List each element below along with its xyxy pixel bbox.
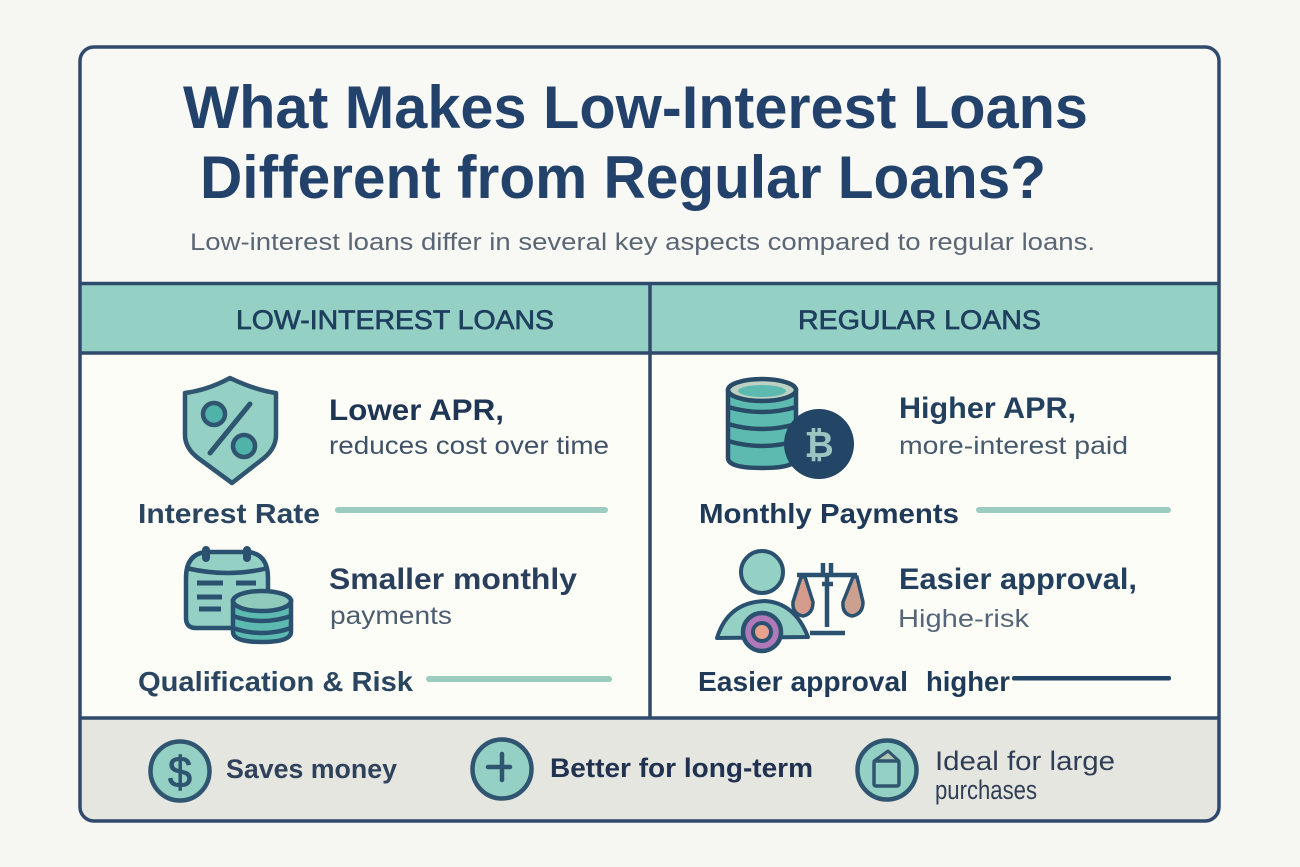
text: lower APR: Lower APR, [329, 394, 504, 427]
label: easier approval higher with rule: higher [926, 666, 1010, 697]
main card [80, 47, 1219, 821]
text: easier approval: Easier approval, [899, 563, 1137, 596]
text: smaller monthly [329, 563, 577, 630]
text: easier approval [898, 563, 1137, 633]
text: smaller monthly: payments [330, 602, 452, 630]
text: smaller monthly: Smaller monthly [329, 563, 577, 596]
label: qualification and risk with rule [138, 666, 612, 697]
footer band background [80, 718, 1219, 821]
label: monthly payments with rule [699, 498, 1171, 529]
icon: shopping bag circle [858, 740, 916, 800]
title area background [80, 47, 1219, 284]
title: Different from Regular Loans? [200, 144, 1046, 211]
text: lower APR [329, 394, 609, 460]
text: ideal for large purchases: purchases [935, 775, 1037, 805]
icon: percent shield [185, 378, 276, 483]
icon: calendar with coins [186, 550, 291, 642]
subtitle: Low-interest loans differ in several key aspects compared to regular loans. [190, 229, 1095, 256]
column header band [80, 284, 1219, 353]
text: better for long-term: Better for long-term [550, 753, 813, 783]
text: lower APR: reduces cost over time [329, 432, 609, 460]
label: easier approval higher with rule [698, 666, 1171, 697]
label: interest rate with rule [138, 498, 608, 529]
text: higher APR [899, 392, 1128, 460]
column heading: low-interest loans: LOW-INTEREST LOANS [236, 305, 554, 335]
column heading: regular loans: REGULAR LOANS [798, 305, 1041, 335]
label: easier approval higher with rule: Easier approval [698, 666, 908, 697]
icon: plus circle [472, 740, 532, 798]
text: higher APR: Higher APR, [899, 392, 1076, 425]
title [183, 74, 1088, 211]
text: ideal for large purchases [935, 746, 1115, 805]
icon: dollar circle: $ [168, 748, 192, 797]
icon: dollar circle [150, 742, 210, 800]
currency symbol: ₿ [804, 424, 834, 465]
text: ideal for large purchases: Ideal for large [935, 746, 1115, 776]
label: monthly payments with rule: Monthly Payments [699, 498, 959, 529]
text: easier approval: Highe-risk [898, 605, 1030, 633]
title: What Makes Low-Interest Loans [183, 74, 1088, 141]
text: higher APR: more-interest paid [899, 432, 1128, 460]
text: saves money: Saves money [226, 754, 397, 784]
label: qualification and risk with rule: Qualification & Risk [138, 666, 413, 697]
label: interest rate with rule: Interest Rate [138, 498, 320, 529]
icon: person with scales [717, 551, 863, 651]
icon: coin stack with currency coin [728, 379, 854, 479]
